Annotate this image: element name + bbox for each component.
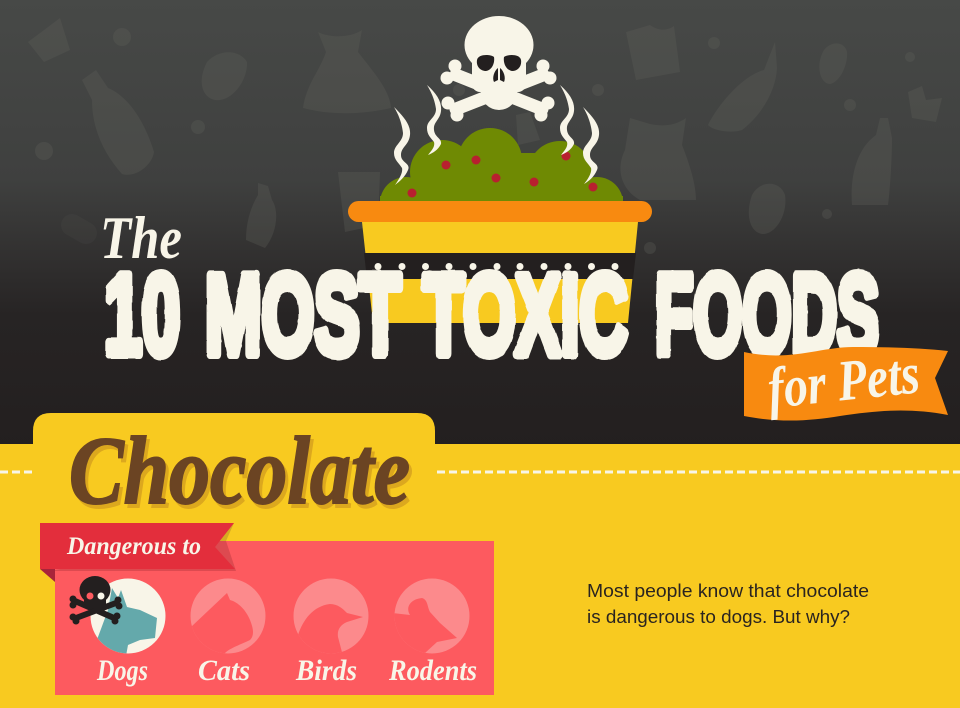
text block: intro: is dangerous to dogs. But why? [587, 607, 850, 627]
dashed divider [0, 470, 960, 474]
icon: black skull marker [70, 576, 122, 624]
label: Rodents: Rodents [388, 654, 477, 687]
bowl dark band [364, 253, 636, 279]
icon: dog [70, 576, 166, 656]
label: Birds: Birds [295, 654, 357, 687]
label: Cats: Cats [198, 654, 250, 687]
label: Dogs: Dogs [96, 654, 148, 687]
ribbon: Dangerous to: Dangerous to [66, 533, 201, 560]
panel background [55, 541, 494, 695]
title [100, 205, 879, 379]
ribbon: for Pets: for Pets [765, 340, 923, 421]
icon: skull and crossbones [440, 16, 556, 122]
icon: rodent [394, 578, 470, 654]
heading: Chocolate: Chocolate [72, 421, 413, 528]
text block: intro [587, 581, 869, 627]
title line: 10 Most Toxic Foods: MOST [205, 252, 401, 379]
food mound [380, 128, 623, 229]
ribbon: Dangerous to [40, 523, 235, 569]
yellow section background [0, 444, 960, 708]
text block: intro: Most people know that chocolate [587, 581, 869, 601]
background silhouettes of food bags and bottles [28, 18, 942, 254]
title line: 10 Most Toxic Foods [104, 252, 879, 379]
title line: 10 Most Toxic Foods: TOXIC [423, 252, 628, 379]
title line: 10 Most Toxic Foods: 10 [104, 252, 180, 379]
bowl dots [374, 263, 618, 270]
bowl body [362, 222, 638, 323]
icon: cat [190, 578, 266, 654]
title word: The: The [100, 205, 182, 271]
tab behind heading [33, 413, 435, 444]
heading: Chocolate: Chocolate [69, 417, 410, 524]
dark header background [0, 0, 960, 450]
berries [408, 152, 598, 198]
panel: dangerous to [40, 523, 494, 695]
icon: bird [294, 578, 368, 654]
bowl of toxic food [348, 85, 652, 323]
bowl rim [348, 201, 652, 222]
ribbon fold [40, 569, 55, 582]
steam wisps [394, 85, 599, 185]
